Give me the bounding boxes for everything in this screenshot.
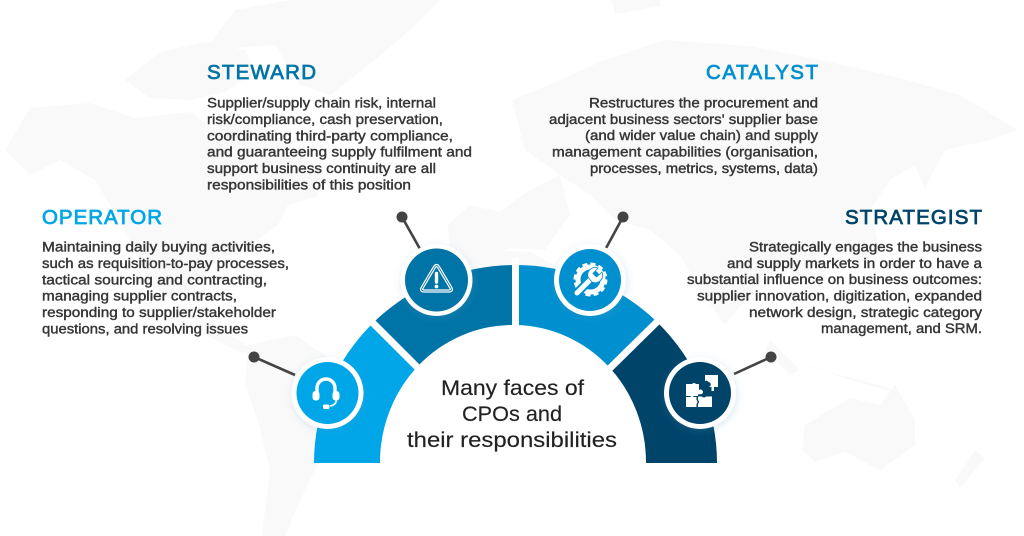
- text: catalyst description: processes, metrics, systems, data): [590, 161, 818, 176]
- text: strategist description: Strategically engages the business: [749, 240, 982, 254]
- heading: steward: STEWARD: [207, 61, 316, 84]
- text: operator description: responding to supplier/stakeholder: [42, 305, 277, 320]
- text: steward description: Supplier/supply chain risk, internal: [207, 96, 436, 110]
- text: operator description: Maintaining daily buying activities,: [42, 240, 275, 254]
- icon: puzzle pieces: [664, 357, 736, 429]
- connector: catalyst: [605, 212, 628, 250]
- text: operator description: managing supplier contracts,: [42, 288, 237, 304]
- text: strategist description: supplier innovation, digitization, expanded: [697, 288, 982, 304]
- panel: strategist: [687, 206, 983, 336]
- heading: operator: OPERATOR: [42, 206, 162, 229]
- panel: operator: [42, 206, 289, 336]
- text: steward description: responsibilities of this position: [207, 178, 411, 192]
- panel: steward: [207, 61, 472, 192]
- text: strategist description: [687, 240, 983, 336]
- white center: [380, 325, 646, 470]
- text: catalyst description: adjacent business sectors' supplier base: [549, 112, 818, 127]
- connector: operator: [248, 352, 295, 375]
- center title: Many faces of: [441, 376, 584, 400]
- text: steward description: [207, 96, 472, 192]
- text: strategist description: network design, strategic category: [749, 305, 982, 320]
- text: steward description: coordinating third-party compliance,: [207, 128, 453, 144]
- semicircle diagram: [314, 258, 717, 470]
- connector: steward: [396, 212, 420, 249]
- heading: strategist: STRATEGIST: [845, 206, 982, 229]
- text: steward description: support business continuity are all: [207, 161, 436, 176]
- segment: steward: [373, 265, 516, 367]
- text: strategist description: and supply markets in order to have a: [727, 256, 983, 271]
- segment: catalyst: [516, 265, 657, 368]
- text: catalyst description: Restructures the procurement and: [589, 96, 818, 110]
- icon: gear and wrench: [554, 244, 626, 316]
- text: strategist description: substantial influence on business outcomes:: [687, 272, 982, 287]
- icon: headset: [292, 357, 364, 429]
- text: catalyst description: management capabilities (organisation,: [552, 144, 818, 160]
- segment: strategist: [610, 322, 717, 463]
- panel: catalyst: [549, 61, 818, 176]
- text: steward description: and guaranteeing supply fulfilment and: [207, 144, 472, 160]
- text: catalyst description: (and wider value chain) and supply: [585, 128, 818, 143]
- center title: CPOs and: [462, 402, 562, 426]
- heading: catalyst: CATALYST: [706, 61, 818, 84]
- text: operator description: [42, 240, 289, 336]
- text: strategist description: management, and SRM.: [821, 321, 982, 336]
- icon: warning triangle: [400, 244, 472, 316]
- text: operator description: questions, and resolving issues: [42, 322, 248, 336]
- text: operator description: such as requisition-to-pay processes,: [42, 256, 289, 271]
- center title: [407, 376, 617, 452]
- segment: operator: [314, 323, 417, 463]
- center title: their responsibilities: [407, 428, 617, 452]
- text: catalyst description: [549, 96, 818, 176]
- connector: strategist: [734, 352, 776, 374]
- text: operator description: tactical sourcing and contracting,: [42, 272, 267, 288]
- text: steward description: risk/compliance, cash preservation,: [207, 112, 443, 127]
